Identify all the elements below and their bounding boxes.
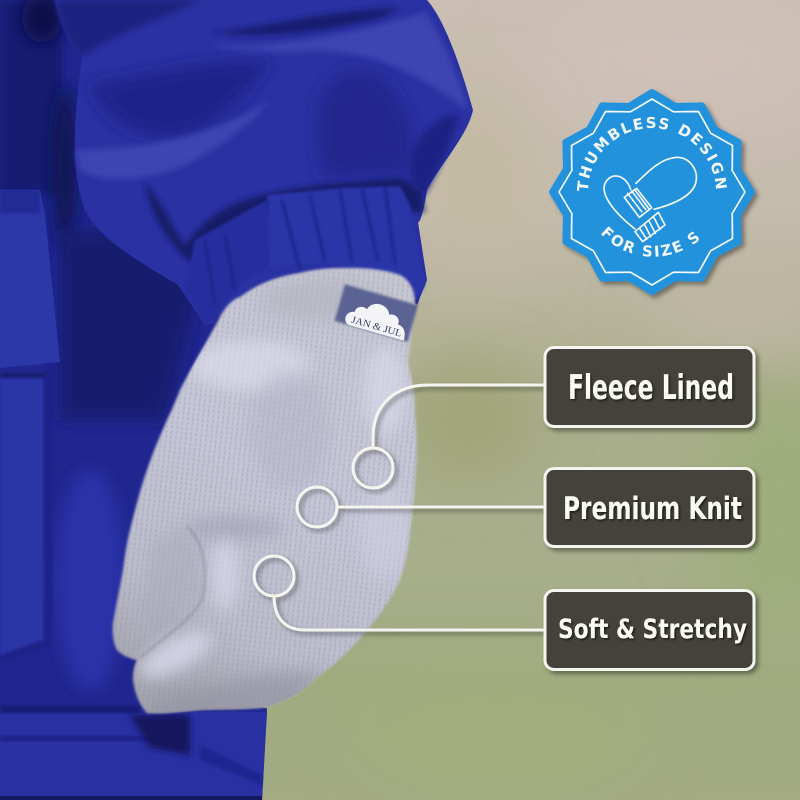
label cloud bbox=[344, 296, 412, 341]
callout connector: Soft and Stretchy bbox=[254, 556, 545, 630]
label: Premium Knit: Premium Knit bbox=[563, 491, 742, 527]
jacket hem bbox=[0, 708, 267, 800]
badge top text: THUMBLESS DESIGN bbox=[576, 116, 727, 191]
sewn label: Jan & Jul bbox=[335, 284, 418, 342]
label: Soft and Stretchy: Soft & Stretchy bbox=[558, 614, 747, 645]
jacket body bbox=[0, 0, 267, 800]
badge: thumbless design for size S bbox=[549, 89, 760, 300]
icon: pair of mittens bbox=[604, 157, 696, 242]
label: Premium Knit bbox=[545, 468, 754, 546]
callout connector: Premium Knit bbox=[297, 487, 545, 527]
label: Soft and Stretchy bbox=[545, 590, 754, 670]
badge scalloped shape bbox=[552, 92, 752, 292]
jacket pocket flap bbox=[0, 190, 60, 368]
badge inner line bbox=[559, 99, 745, 285]
mitten bbox=[110, 266, 418, 715]
sewn label: Jan & Jul: JAN & JUL bbox=[350, 315, 403, 340]
callout connector: Fleece Lined bbox=[353, 385, 545, 488]
badge bottom text: FOR SIZE S bbox=[601, 226, 699, 257]
jacket pocket bbox=[0, 372, 44, 656]
thumb crease bbox=[140, 526, 205, 658]
jacket sleeve bbox=[55, 0, 473, 325]
label: Fleece Lined bbox=[545, 348, 754, 426]
